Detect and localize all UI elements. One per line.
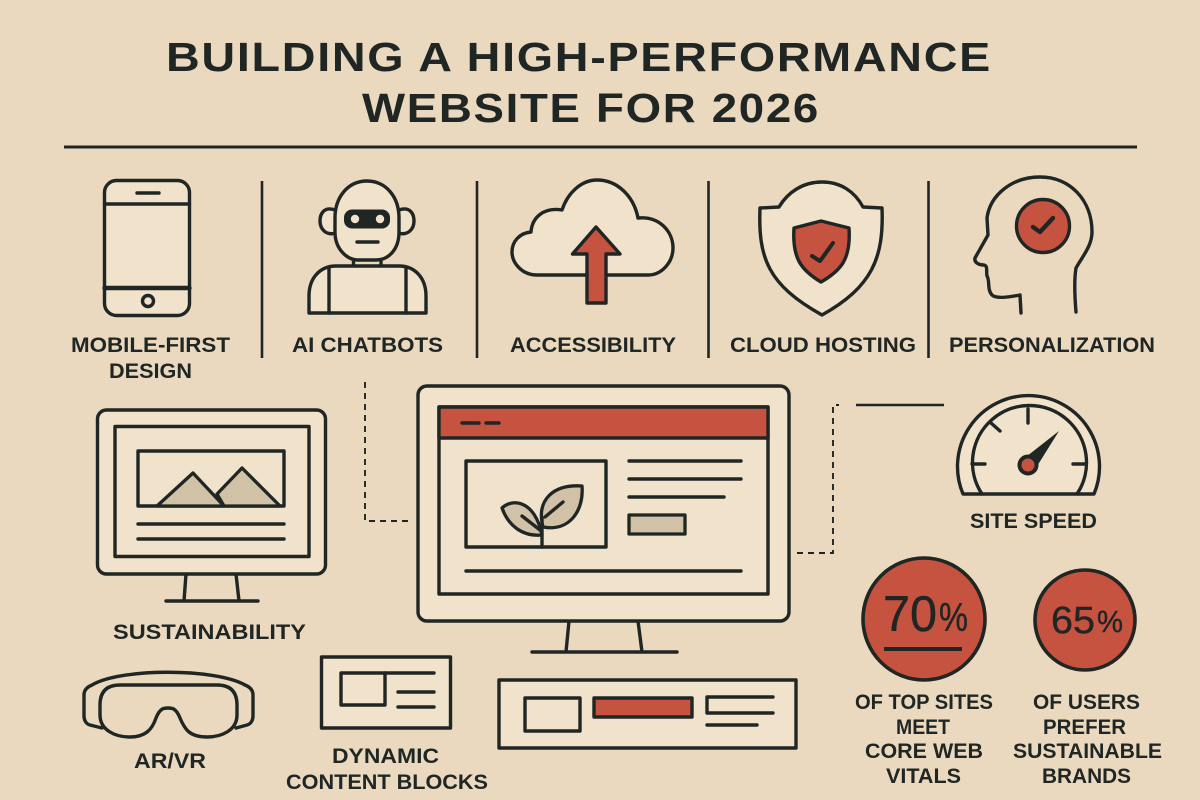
icon: VR goggles xyxy=(84,672,253,737)
stat caption xyxy=(1013,691,1162,788)
label: personalization: PERSONALIZATION xyxy=(949,334,1155,357)
title xyxy=(166,34,992,131)
label: cloud hosting: CLOUD HOSTING xyxy=(730,334,916,357)
lower layout panel xyxy=(499,680,796,748)
label: site speed: SITE SPEED xyxy=(970,510,1097,533)
stat caption: MEET xyxy=(896,716,950,739)
panel: mobile-first design xyxy=(71,180,230,383)
label: AR/VR: AR/VR xyxy=(134,750,206,773)
icon: monitor with landscape xyxy=(98,410,326,601)
panel: personalization xyxy=(949,177,1155,357)
icon: shield with check xyxy=(760,182,882,315)
label: mobile-first design xyxy=(71,334,230,383)
panel: site speed xyxy=(957,396,1100,533)
stat: 65 percent: 65 xyxy=(1051,600,1095,642)
stat caption: PREFER xyxy=(1043,716,1126,739)
stat caption xyxy=(855,691,993,788)
stat caption: BRANDS xyxy=(1042,765,1131,788)
button xyxy=(629,515,685,534)
title: WEBSITE FOR 2026 xyxy=(362,85,820,131)
label: mobile-first design: MOBILE-FIRST xyxy=(71,334,230,357)
stat: 70 percent: % xyxy=(939,596,968,640)
label: AI chatbots: AI CHATBOTS xyxy=(292,334,443,357)
stat: 70 percent: 70 xyxy=(883,586,937,642)
stat: 65 percent xyxy=(1013,570,1162,788)
title: BUILDING A HIGH-PERFORMANCE xyxy=(166,34,992,80)
stat caption: SUSTAINABLE xyxy=(1013,740,1162,763)
panel: sustainability xyxy=(98,410,326,644)
stat: 70 percent xyxy=(855,558,993,788)
stat caption: VITALS xyxy=(886,765,961,788)
panel: AR/VR xyxy=(84,672,253,773)
label: dynamic content blocks: DYNAMIC xyxy=(332,745,439,768)
icon: robot xyxy=(309,181,426,313)
panel: dynamic content blocks xyxy=(286,657,488,794)
icon: smartphone xyxy=(104,180,190,316)
label: sustainability: SUSTAINABILITY xyxy=(113,621,306,644)
icon: content block layout xyxy=(322,657,450,728)
icon: cloud with upload arrow xyxy=(512,180,673,303)
label: mobile-first design: DESIGN xyxy=(109,360,192,383)
image placeholder with plant xyxy=(466,461,606,547)
icon: head with check xyxy=(975,177,1092,313)
browser title bar xyxy=(439,407,768,438)
stat caption: OF TOP SITES xyxy=(855,691,993,714)
stat: 65 percent: % xyxy=(1097,604,1123,639)
stat caption: CORE WEB xyxy=(865,740,983,763)
central monitor illustration xyxy=(418,386,789,652)
icon: speedometer gauge xyxy=(957,396,1100,494)
label: dynamic content blocks: CONTENT BLOCKS xyxy=(286,771,488,794)
stat caption: OF USERS xyxy=(1033,691,1140,714)
panel: cloud hosting xyxy=(730,182,916,357)
panel: AI chatbots xyxy=(292,181,443,357)
label: accessibility: ACCESSIBILITY xyxy=(510,334,676,357)
label: dynamic content blocks xyxy=(286,745,488,794)
panel: accessibility xyxy=(510,180,676,357)
